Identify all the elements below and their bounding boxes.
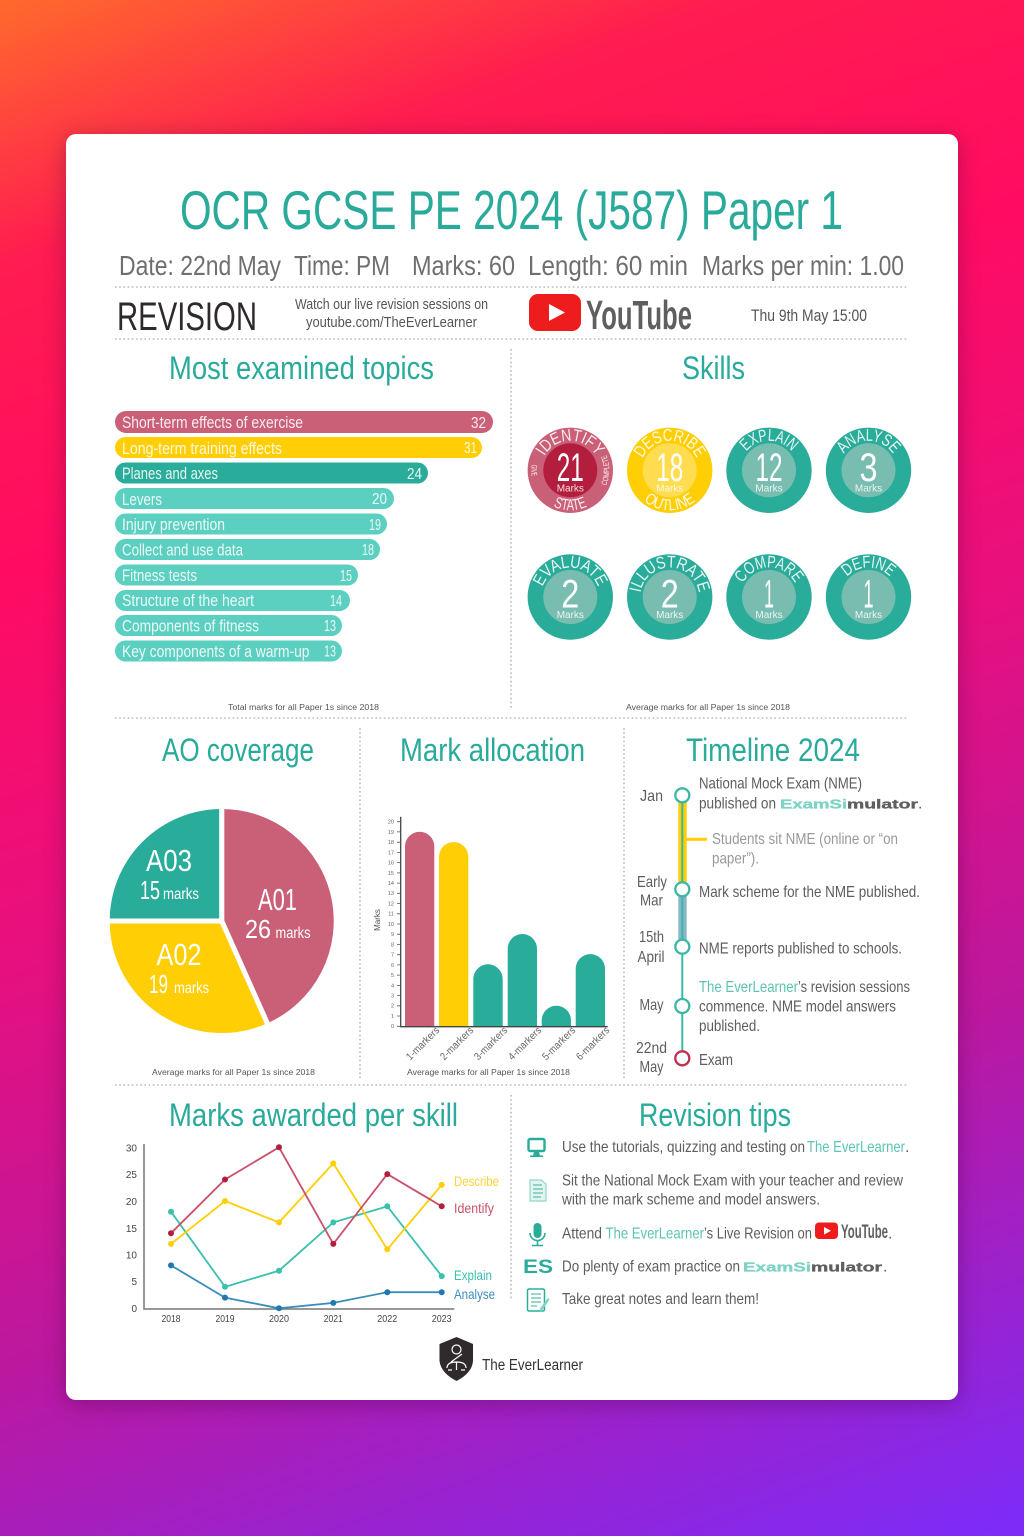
icon: YouTube small logo: YouTube: [841, 1222, 888, 1243]
timeline dates: Mar: [640, 892, 664, 910]
line chart: marks awarded per skill: 2018: [162, 1314, 181, 1325]
bar chart: most examined topics: Planes and axes: [122, 464, 218, 483]
bar chart: most examined topics: Short-term effects of exercise: [122, 413, 303, 432]
timeline spine: [675, 788, 707, 1065]
bar chart: mark allocation: 13: [388, 891, 394, 897]
skill badge: analyse: 3: [860, 446, 878, 490]
heading: marks awarded per skill: Marks awarded per skill: [169, 1097, 458, 1133]
chart legend: Analyse: [454, 1286, 495, 1302]
revision tip 2: with the mark scheme and model answers.: [561, 1192, 820, 1208]
skill badge: evaluate: [528, 554, 613, 640]
skill badge: describe: 18: [656, 446, 683, 490]
heading: most examined topics: Most examined topics: [169, 350, 434, 386]
revision tip 1: The EverLearner: [807, 1139, 906, 1156]
skill badge: identify: STATE: [554, 496, 587, 510]
line chart: marks awarded per skill: 2019: [216, 1314, 235, 1325]
line chart: marks awarded per skill: [126, 1144, 499, 1325]
timeline events: mulator: [847, 798, 918, 812]
bar chart: mark allocation: 2-markers: [438, 1025, 476, 1063]
line chart: marks awarded per skill: 2022: [377, 1314, 398, 1325]
revision tip 3: The EverLearner: [606, 1226, 705, 1242]
heading: AO coverage: AO coverage: [162, 732, 314, 768]
pie chart: AO coverage: 15: [140, 875, 160, 905]
revision tip 4: mulator: [811, 1260, 882, 1274]
timeline events: ExamSi: [780, 798, 847, 812]
skill badge: identify: COMPLETE: [601, 455, 610, 485]
bar chart: mark allocation: 4-markers: [506, 1025, 544, 1063]
exam details row: Time: PM: [294, 250, 390, 281]
skill badge: compare: 1: [764, 572, 774, 616]
bar chart: most examined topics: 14: [330, 593, 342, 610]
line chart: marks awarded per skill: 25: [126, 1170, 137, 1181]
line chart: marks awarded per skill: 5: [131, 1277, 137, 1288]
series: analyse: [168, 1262, 445, 1311]
timeline dates: April: [638, 949, 664, 966]
bar chart: mark allocation: 14: [388, 881, 394, 887]
skill badge: illustrate: 2: [661, 572, 679, 616]
exam details row: Marks: 60: [412, 250, 515, 281]
line chart: marks awarded per skill: 2020: [269, 1314, 289, 1325]
bar chart: most examined topics: Structure of the heart: [122, 591, 254, 610]
skill badge: compare: Marks: [755, 610, 783, 621]
series: explain: [168, 1203, 445, 1290]
pie chart: AO coverage: marks: [163, 886, 199, 903]
timeline dates: 22nd: [636, 1040, 667, 1057]
revision tip 3: .: [888, 1226, 892, 1242]
bar chart: mark allocation: 19: [388, 830, 394, 836]
skill badge: evaluate: EVALUATE: [532, 556, 608, 586]
timeline events: NME reports published to schools.: [699, 940, 902, 958]
source note: AO coverage: Average marks for all Paper 1s since 2018: [152, 1068, 316, 1077]
bar chart: most examined topics: 19: [369, 517, 381, 534]
skill badge: identify: [528, 428, 613, 513]
skill badge: illustrate: ILLUSTRATE: [629, 556, 710, 592]
skill badge: analyse: ANALYSE: [838, 429, 902, 454]
bar chart: mark allocation: 5: [391, 973, 394, 979]
revision tip 4: ExamSi: [743, 1260, 811, 1274]
revision tip 1: Use the tutorials, quizzing and testing on: [562, 1139, 805, 1156]
revision tip 3: [530, 1222, 892, 1246]
icon: exam paper: [530, 1180, 546, 1201]
line chart: marks awarded per skill: 10: [126, 1250, 137, 1262]
bar chart: mark allocation: 4: [391, 983, 394, 989]
exam details row: [119, 250, 904, 281]
revision tip 3: ’s Live Revision on: [704, 1226, 812, 1242]
pie chart: AO coverage: marks: [276, 925, 310, 942]
bar chart: most examined topics: 18: [362, 542, 374, 559]
skill badge: analyse: Marks: [855, 483, 882, 494]
timeline events: National Mock Exam (NME): [699, 776, 862, 792]
timeline events: published.: [699, 1018, 760, 1035]
timeline dates: Jan: [640, 788, 663, 805]
skill badge: describe: DESCRIBE: [633, 429, 706, 458]
icon: microphone: [530, 1223, 545, 1246]
skill badge: analyse: [826, 428, 912, 513]
bar chart: most examined topics: Injury prevention: [122, 515, 225, 534]
bar chart: most examined topics: Levers: [122, 490, 162, 509]
bar chart: mark allocation: 15: [388, 871, 394, 877]
bar chart: most examined topics: Collect and use data: [122, 540, 243, 560]
bar chart: mark allocation: 17: [388, 850, 394, 856]
bar chart: most examined topics: [115, 411, 493, 662]
line chart: marks awarded per skill: 2023: [432, 1314, 452, 1325]
panel: white card: [66, 134, 958, 1400]
bar chart: mark allocation: 7: [391, 953, 394, 959]
skill badge: compare: COMPARE: [735, 556, 804, 583]
timeline events: Mark scheme for the NME published.: [699, 884, 920, 901]
heading: revision tips: Revision tips: [639, 1097, 791, 1133]
source note: mark allocation: Average marks for all Paper 1s since 2018: [407, 1068, 571, 1077]
bar chart: mark allocation: 16: [388, 860, 394, 866]
line chart: marks awarded per skill: 15: [126, 1224, 137, 1235]
bar chart: most examined topics: 20: [372, 491, 387, 508]
pie chart: AO coverage: 19: [149, 969, 168, 999]
skill badge: identify: IDENTIFY: [535, 429, 606, 455]
timeline events: Exam: [699, 1052, 733, 1069]
chart legend: Describe: [454, 1173, 499, 1189]
bar chart: mark allocation: 12: [388, 901, 394, 907]
bar chart: mark allocation: 8: [391, 942, 394, 948]
bar chart: most examined topics: Components of fitness: [122, 616, 259, 636]
skill badge: describe: OUTLINE: [646, 492, 696, 510]
revision tip 1: .: [905, 1139, 909, 1156]
bar chart: most examined topics: 31: [464, 440, 477, 457]
bar chart: mark allocation: 20: [388, 820, 394, 826]
bar chart: mark allocation: 1: [391, 1014, 394, 1020]
skill badge: describe: Marks: [656, 483, 683, 494]
bar chart: mark allocation: 1-markers: [404, 1025, 442, 1063]
live revision sessions text: Watch our live revision sessions on: [295, 296, 488, 313]
bar chart: mark allocation: 0: [391, 1024, 394, 1030]
timeline events: The EverLearner: [699, 979, 799, 996]
timeline events: [699, 776, 922, 1069]
revision tip 4: [523, 1257, 887, 1278]
revision tip 3: Attend: [562, 1226, 602, 1242]
bar chart: most examined topics: Fitness tests: [122, 566, 197, 585]
revision tip 4: Do plenty of exam practice on: [562, 1258, 740, 1276]
line chart: marks awarded per skill: 2021: [324, 1314, 343, 1325]
icon: shield: [440, 1337, 473, 1381]
logo: The EverLearner: [440, 1337, 583, 1381]
timeline events: Students sit NME (online or “on: [712, 831, 898, 848]
icon: YouTube small logo: [815, 1222, 888, 1243]
pie chart: AO coverage: A01: [258, 882, 297, 917]
live revision sessions text: youtube.com/TheEverLearner: [306, 314, 477, 331]
source note: skills: Average marks for all Paper 1s since 2018: [626, 703, 791, 712]
skill badge: illustrate: Marks: [656, 610, 683, 621]
exam details row: Marks per min: 1.00: [702, 250, 904, 281]
revision tip 5: [528, 1289, 759, 1312]
series: describe: [168, 1160, 445, 1252]
revision tip 4: .: [883, 1258, 887, 1276]
timeline events: .: [918, 796, 922, 812]
session date: Thu 9th May 15:00: [751, 306, 867, 325]
icon: YouTube logo: YouTube: [586, 292, 692, 338]
revision tip 2: [530, 1172, 903, 1208]
pie chart: AO coverage: 26: [245, 914, 271, 944]
bar chart: mark allocation: 2: [391, 1004, 394, 1010]
skill badge: identify: 21: [557, 446, 584, 490]
pie chart: AO coverage: A02: [156, 937, 202, 972]
icon: ES monogram: ES: [523, 1257, 553, 1278]
revision tip 5: Take great notes and learn them!: [562, 1291, 759, 1308]
bar chart: most examined topics: 13: [324, 644, 336, 660]
skill badge: explain: Marks: [755, 483, 783, 494]
pie chart: AO coverage: [107, 806, 336, 1036]
bar chart: mark allocation: 9: [391, 932, 394, 938]
skill badge: define: DEFINE: [840, 556, 897, 576]
bar chart: mark allocation: 10: [388, 922, 394, 928]
bar chart: mark allocation: [373, 817, 612, 1063]
skill badge: compare: [726, 554, 812, 640]
heading: mark allocation: Mark allocation: [400, 732, 585, 768]
line chart: marks awarded per skill: 30: [126, 1144, 137, 1154]
bar chart: mark allocation: 6-markers: [574, 1025, 612, 1063]
skill badge: define: Marks: [855, 610, 882, 621]
skill badge: identify: Marks: [557, 483, 584, 494]
timeline dates: May: [640, 997, 664, 1014]
bar chart: most examined topics: 24: [407, 466, 422, 483]
bar chart: mark allocation: Marks: [373, 909, 382, 931]
source note: topics: Total marks for all Paper 1s since 2018: [228, 703, 380, 712]
pie chart: AO coverage: marks: [174, 980, 209, 997]
timeline dates: 15th: [639, 929, 664, 946]
timeline events: ’s revision sessions: [798, 979, 910, 996]
bar chart: mark allocation: 3-markers: [472, 1025, 510, 1063]
skill badge: identify: GIVE: [531, 464, 538, 476]
bar chart: most examined topics: 32: [471, 415, 486, 432]
bar chart: mark allocation: 11: [388, 912, 394, 918]
series: identify: [168, 1144, 445, 1247]
bar chart: mark allocation: 5-markers: [540, 1025, 578, 1063]
heading: skills: Skills: [682, 350, 745, 386]
bar chart: mark allocation: 3: [391, 994, 394, 1000]
timeline events: published on: [699, 796, 776, 812]
timeline dates: May: [640, 1059, 664, 1076]
bar chart: most examined topics: Long-term training effects: [122, 439, 282, 458]
revision heading: REVISION: [117, 295, 257, 339]
exam details row: Length: 60 min: [528, 250, 688, 281]
skill badge: explain: EXPLAIN: [738, 429, 799, 451]
bar chart: most examined topics: 15: [340, 568, 352, 585]
chart legend: Explain: [454, 1267, 492, 1283]
skill badge: evaluate: Marks: [557, 610, 584, 621]
skill badge: illustrate: [627, 554, 712, 640]
skill badge: define: [826, 554, 912, 640]
icon: notes and pencil: [528, 1289, 550, 1312]
line chart: marks awarded per skill: 20: [126, 1197, 137, 1208]
icon: YouTube logo: [529, 292, 692, 338]
logo: The EverLearner: The EverLearner: [482, 1357, 583, 1374]
line chart: marks awarded per skill: 0: [131, 1304, 137, 1315]
heading: timeline: Timeline 2024: [686, 732, 860, 768]
skill badge: define: 1: [864, 572, 874, 616]
skill badge: describe: [627, 428, 712, 513]
bar chart: mark allocation: 18: [388, 840, 394, 846]
skill badge: evaluate: 2: [561, 572, 579, 616]
revision tip 2: Sit the National Mock Exam with your teacher and review: [562, 1172, 903, 1190]
skill badge: explain: 12: [756, 446, 782, 490]
timeline dates: [636, 788, 667, 1076]
chart legend: Identify: [454, 1200, 494, 1216]
timeline events: paper”).: [712, 850, 759, 868]
icon: monitor: [528, 1139, 544, 1157]
exam details row: Date: 22nd May: [119, 250, 281, 281]
bar chart: most examined topics: 13: [324, 618, 336, 635]
live revision sessions text: [295, 296, 488, 331]
timeline dates: Early: [637, 874, 667, 891]
pie chart: AO coverage: A03: [146, 843, 192, 878]
skill badge: explain: [726, 428, 812, 513]
bar chart: mark allocation: 6: [391, 963, 394, 969]
bar chart: most examined topics: Key components of a warm-up: [122, 642, 310, 661]
chart legend: [454, 1173, 499, 1302]
timeline: [636, 776, 922, 1076]
timeline events: commence. NME model answers: [699, 998, 896, 1016]
